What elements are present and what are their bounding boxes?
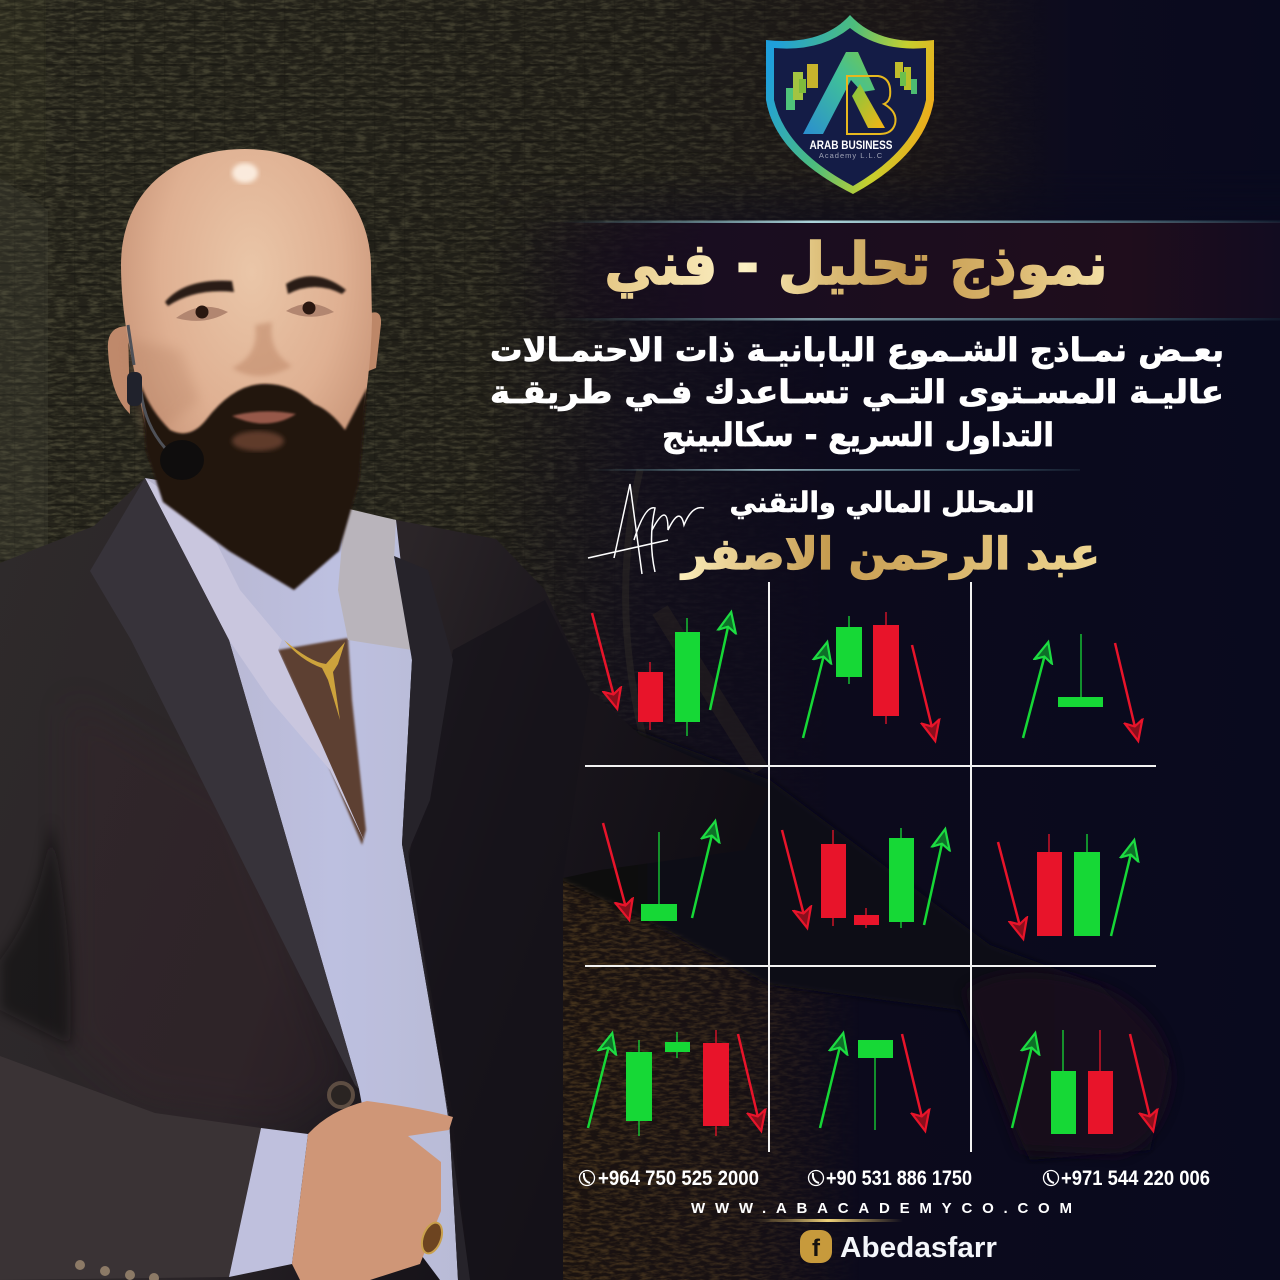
- logo candles left: [786, 64, 818, 110]
- candlestick pattern 4: [603, 822, 715, 921]
- chest: [278, 638, 366, 845]
- right jacket dark side: [408, 600, 590, 1280]
- description text: بعـض نمـاذج الشـموع اليابانيـة ذات الاحتمـالات: [490, 331, 1224, 369]
- description text: عاليـة المسـتوى التـي تسـاعدك فـي طريقـة: [490, 373, 1224, 411]
- phone 3: +971 544 220 006: [1061, 1167, 1210, 1190]
- candlestick pattern 5: [782, 828, 945, 928]
- nose: [232, 322, 292, 376]
- headset microphone: [128, 325, 165, 448]
- lips: [232, 411, 296, 424]
- title: نموذج تحليل - فني: [604, 230, 1108, 299]
- candlestick pattern 3: [1023, 634, 1138, 740]
- shirt cuff: [229, 1128, 308, 1277]
- candlestick pattern 8: [820, 1034, 925, 1130]
- head: [121, 149, 372, 560]
- candlestick pattern 6: [998, 834, 1134, 938]
- chin patch: [232, 431, 284, 451]
- scalp highlight: [232, 163, 258, 183]
- arm shadow: [0, 820, 71, 1045]
- jacket button: [329, 1083, 353, 1107]
- jacket: [0, 478, 770, 1280]
- ear right: [366, 312, 381, 372]
- person: presenter in dark suit: [0, 149, 770, 1280]
- hand: [292, 1101, 453, 1280]
- candlestick pattern 2: [803, 612, 935, 740]
- lapel left: [90, 478, 359, 1089]
- collar left: [145, 478, 366, 845]
- facebook handle: [800, 1230, 997, 1264]
- eyes: [176, 307, 228, 321]
- icon: facebook: f: [812, 1235, 821, 1262]
- gold necklace: [284, 640, 345, 720]
- logo letter A: [803, 52, 875, 134]
- lapel right: [394, 556, 470, 1280]
- brows: [165, 281, 234, 306]
- website: WWW.ABACADEMYCO.COM: [691, 1200, 1072, 1217]
- description text: [490, 331, 1224, 454]
- logo candles right: [895, 62, 917, 94]
- handle text: Abedasfarr: [840, 1232, 997, 1264]
- collar right: [338, 508, 412, 650]
- gold ring: [418, 1220, 446, 1256]
- cheek shading: [128, 340, 200, 440]
- logo: Arab Business Academy shield: [766, 15, 934, 194]
- phone 1: +964 750 525 2000: [598, 1167, 759, 1190]
- divider under title: [560, 318, 1280, 320]
- gold divider: [753, 1219, 903, 1222]
- header band behind title: [520, 222, 1280, 318]
- logo wordmark: ARAB BUSINESS: [810, 140, 893, 152]
- jacket torso warm tone: [70, 700, 340, 1120]
- divider top: [560, 220, 1280, 223]
- phone 2: +90 531 886 1750: [826, 1167, 972, 1190]
- person: faint arm and hand behind chart: [555, 700, 1172, 1160]
- description text: التداول السريع - سكالبينج: [662, 416, 1054, 454]
- analyst name: عبد الرحمن الاصفر: [680, 529, 1100, 580]
- sleeve: [0, 1056, 261, 1280]
- candlestick pattern 7: [588, 1030, 761, 1136]
- candlestick pattern 1: [592, 613, 731, 736]
- candlestick pattern 9: [1012, 1030, 1153, 1134]
- divider under description: [590, 469, 1080, 471]
- ear left: [108, 326, 130, 414]
- shirt: [145, 478, 458, 1280]
- logo sub wordmark: Academy L.L.C: [819, 151, 883, 160]
- chart grid: [585, 582, 1156, 1152]
- logo letter B: [847, 76, 896, 134]
- analyst role: المحلل المالي والتقني: [730, 486, 1034, 519]
- signature: [588, 484, 704, 574]
- sleeve buttons: [75, 1260, 159, 1280]
- icon: facebook: [800, 1230, 832, 1263]
- beard: [141, 384, 367, 590]
